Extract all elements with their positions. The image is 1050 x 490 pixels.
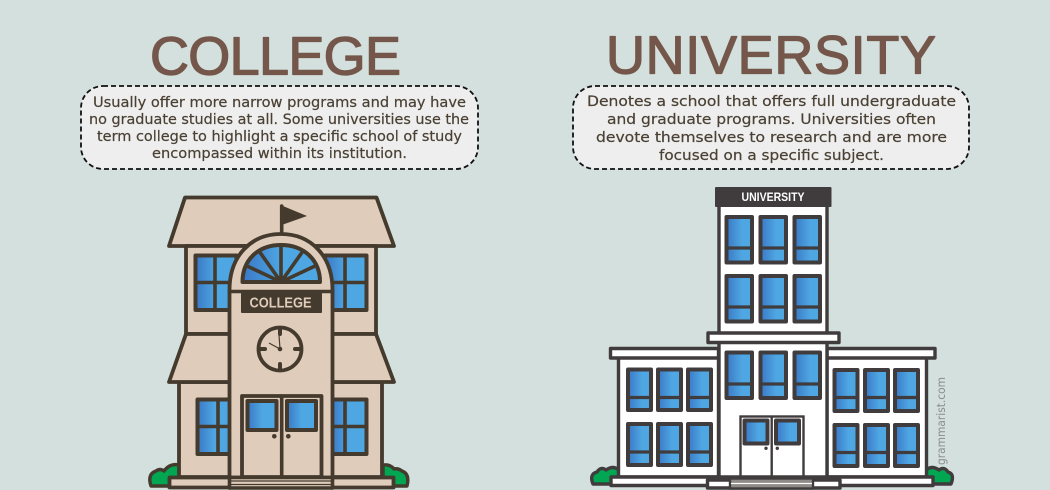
arched fan window — [242, 245, 320, 282]
lower right window — [331, 400, 366, 454]
upper left window — [196, 256, 236, 310]
text block: university description — [573, 86, 969, 169]
left wing windows — [628, 370, 711, 465]
left wing — [610, 348, 718, 477]
icon: left bush — [150, 465, 179, 486]
college sign — [241, 292, 322, 313]
lower left window — [198, 400, 232, 454]
double door — [242, 396, 322, 477]
illustration: college building — [150, 198, 408, 489]
university sign — [715, 187, 832, 207]
icon: flag — [282, 206, 307, 234]
panel: college — [81, 26, 478, 489]
tower lower windows — [726, 352, 820, 398]
right wing — [827, 348, 935, 477]
central tower — [708, 205, 839, 478]
icon: left bush — [592, 468, 619, 484]
entrance tower — [230, 234, 332, 478]
university sign: UNIVERSITY — [742, 192, 805, 204]
upper wall — [186, 246, 376, 334]
college sign: COLLEGE — [250, 295, 312, 311]
icon: right bush — [926, 468, 952, 484]
text block: college description: Usually offer more narrow programs and may have — [93, 95, 466, 111]
lower roof — [169, 334, 394, 382]
text block: university description: devote themselves to research and are more — [596, 130, 947, 146]
icon: right bush — [383, 465, 408, 486]
lower wall — [179, 382, 382, 477]
double door — [740, 416, 804, 478]
tower upper windows — [726, 217, 820, 322]
base and steps — [170, 476, 394, 489]
upper roof — [169, 198, 394, 246]
illustration: university building — [592, 187, 952, 488]
text block: college description: no graduate studies at all. Some universities use the — [89, 112, 469, 128]
base and steps — [611, 477, 933, 488]
text block: college description: term college to highlight a specific school of study — [97, 129, 462, 145]
heading: college: COLLEGE — [150, 26, 401, 86]
upper right window — [325, 256, 366, 310]
credit: grammarist.com: grammarist.com — [934, 377, 948, 465]
text block: college description — [81, 86, 478, 169]
text block: university description: and graduate programs. Universities often — [607, 112, 936, 128]
text block: university description: Denotes a school that offers full undergraduate — [587, 94, 956, 110]
text block: college description: encompassed within its institution. — [152, 146, 407, 162]
heading: university: UNIVERSITY — [606, 26, 936, 86]
panel: university — [573, 26, 969, 488]
icon: clock — [258, 328, 302, 370]
right wing windows — [834, 370, 918, 466]
tower ledge — [708, 333, 839, 342]
text block: university description: focused on a specific subject. — [659, 148, 884, 164]
